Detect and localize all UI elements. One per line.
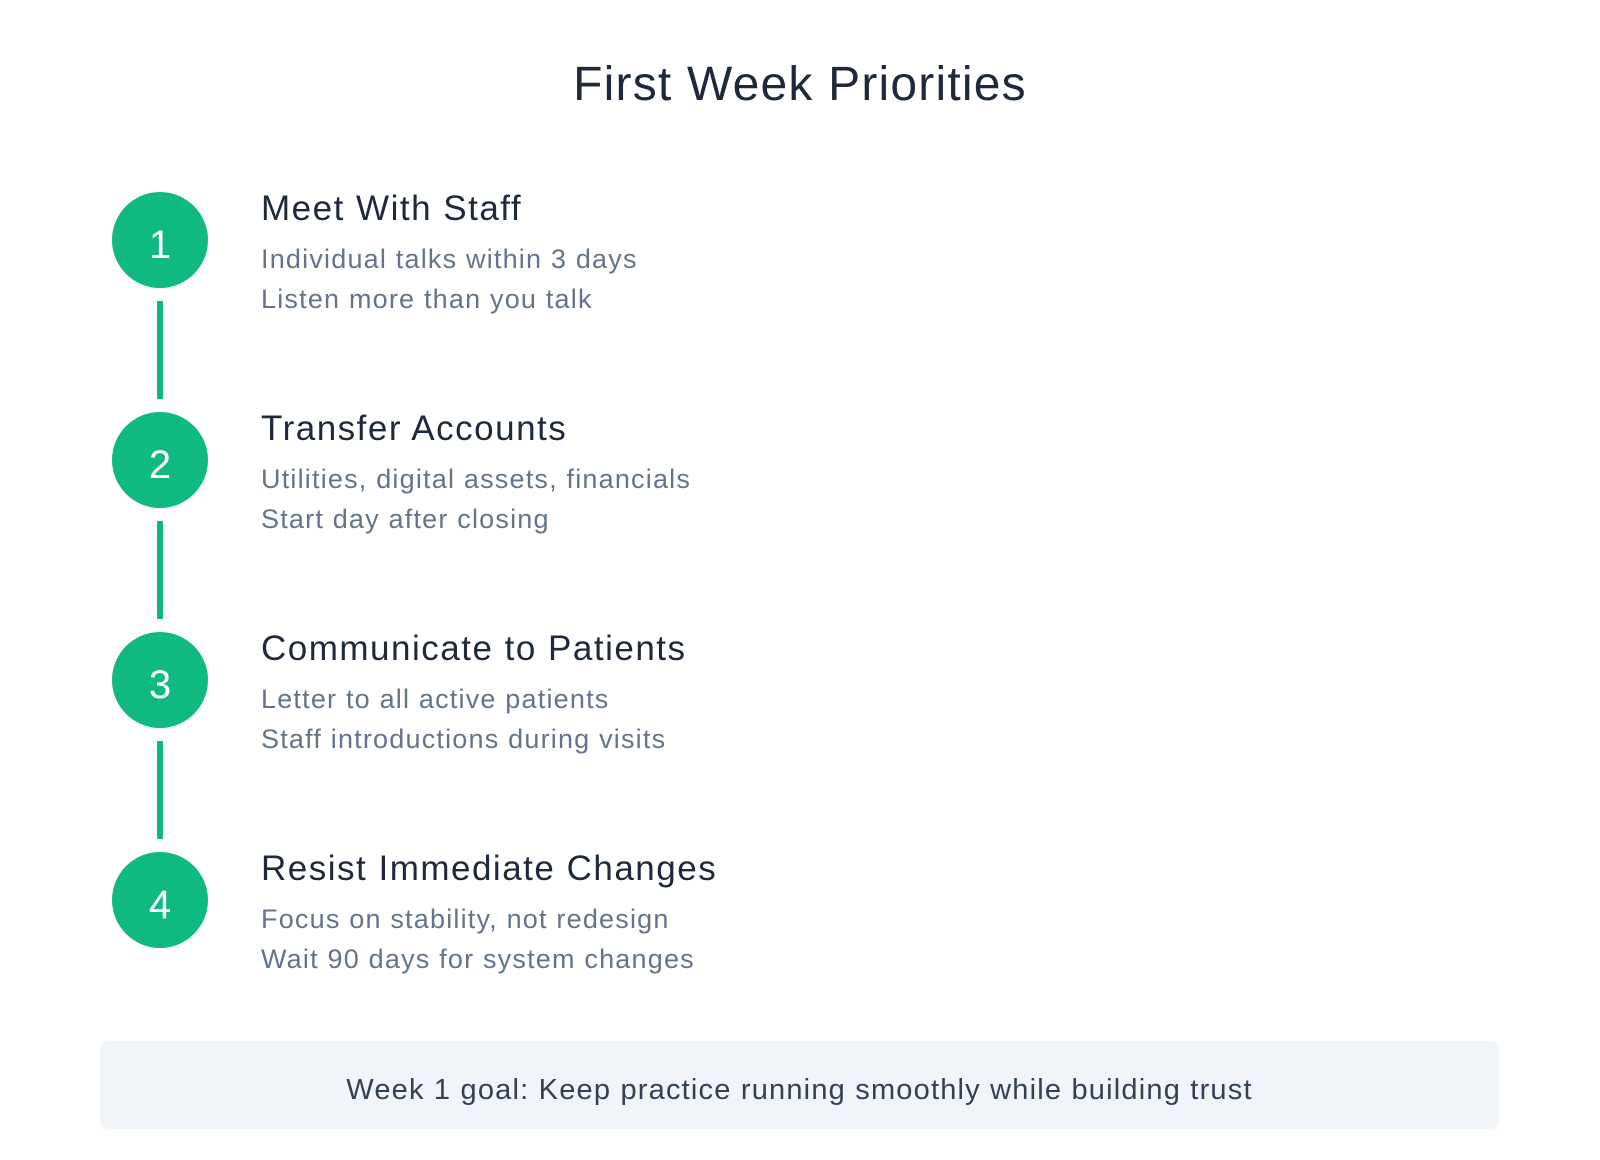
- step 3 text: Staff introductions during visits: [261, 724, 666, 754]
- step 1 text: Meet With Staff: [261, 189, 522, 228]
- step 4 circle: 4: [149, 883, 171, 927]
- step 2 circle: [112, 412, 208, 508]
- step 1 circle: [112, 192, 208, 288]
- step 2 text: Start day after closing: [261, 504, 550, 534]
- step 3 text: Communicate to Patients: [261, 629, 687, 668]
- step 3 text: Letter to all active patients: [261, 684, 609, 714]
- step 3 circle: 3: [149, 663, 171, 707]
- footer callout: Week 1 goal: Keep practice running smoothly while building trust: [346, 1074, 1253, 1106]
- step 4 text: [261, 849, 717, 974]
- step 1 text: Individual talks within 3 days: [261, 244, 638, 274]
- step 4 text: Wait 90 days for system changes: [261, 944, 695, 974]
- step 3 circle: [112, 632, 208, 728]
- step 1 text: [261, 189, 638, 314]
- step 2 circle: 2: [149, 443, 171, 487]
- connector 1-2: [157, 301, 163, 399]
- step 2 text: Transfer Accounts: [261, 409, 567, 448]
- step 4 text: Resist Immediate Changes: [261, 849, 717, 888]
- step 2 text: Utilities, digital assets, financials: [261, 464, 691, 494]
- title: First Week Priorities: [573, 58, 1027, 111]
- connector 3-4: [157, 741, 163, 839]
- footer callout: [100, 1041, 1499, 1129]
- step 1 circle: 1: [149, 223, 171, 267]
- step 1 text: Listen more than you talk: [261, 284, 593, 314]
- step 4 text: Focus on stability, not redesign: [261, 904, 670, 934]
- connector 2-3: [157, 521, 163, 619]
- step 2 text: [261, 409, 691, 534]
- step 3 text: [261, 629, 687, 754]
- step 4 circle: [112, 852, 208, 948]
